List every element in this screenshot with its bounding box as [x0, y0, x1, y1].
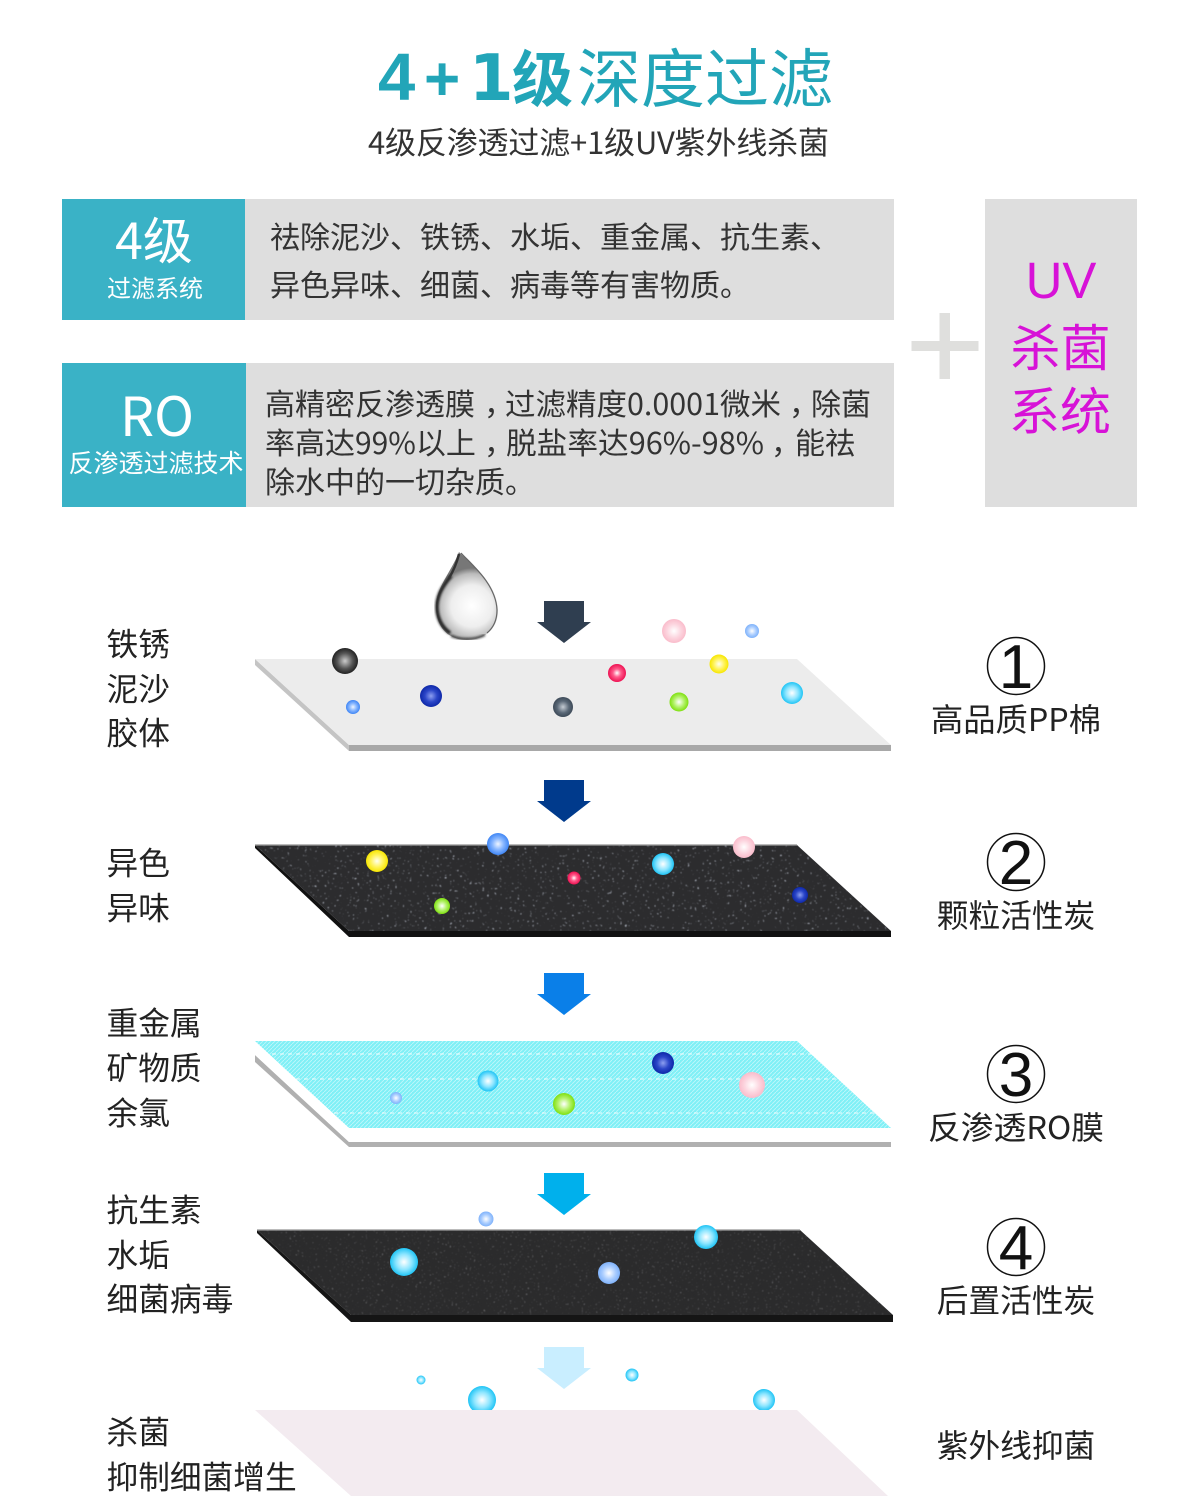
- step 3 label: 反渗透RO膜: [928, 1103, 1104, 1149]
- left labels: layer 1: 铁锈: [106, 620, 170, 666]
- layer 1: PP cotton: [255, 619, 891, 751]
- panel: RO反渗透过滤技术: 高精密反渗透膜: [265, 380, 475, 424]
- panel: RO反渗透过滤技术: ，: [484, 380, 514, 424]
- panel: RO反渗透过滤技术: 除菌: [811, 380, 871, 424]
- left labels: layer 4: 抗生素: [106, 1186, 202, 1232]
- panel: RO反渗透过滤技术: ，: [789, 380, 819, 424]
- step 1 label: 1: [999, 633, 1033, 702]
- panel: 4级过滤系统: [62, 199, 894, 320]
- left labels: layer 2: 异味: [106, 884, 170, 930]
- panel: 4级过滤系统: 祛除泥沙、铁锈、水垢、重金属、抗生素、: [270, 213, 840, 257]
- panel: RO反渗透过滤技术: [62, 363, 894, 507]
- arrow 2: [537, 780, 591, 822]
- left labels: layer 4: [106, 1186, 233, 1320]
- step 3 label: 3: [999, 1041, 1033, 1110]
- left labels: layer 4: 水垢: [106, 1230, 170, 1276]
- left labels: layer 3: 矿物质: [106, 1044, 202, 1090]
- layer 2: granular activated carbon: [255, 833, 891, 937]
- panel: RO反渗透过滤技术: ，: [771, 419, 801, 463]
- arrow 4: [537, 1173, 591, 1215]
- layer 5: UV sterilisation: [255, 1368, 888, 1496]
- panel: UV杀菌系统: UV: [1026, 252, 1096, 309]
- panel: RO反渗透过滤技术: 除水中的一切杂质。: [265, 458, 535, 502]
- step 1 label: [931, 633, 1101, 741]
- step 2 label: 2: [999, 829, 1033, 898]
- icon: water drop: [436, 552, 498, 640]
- panel: 4级过滤系统: 过滤系统: [107, 269, 203, 304]
- step 1 label: 高品质PP棉: [931, 695, 1101, 741]
- panel: UV杀菌系统: 杀菌: [1010, 309, 1110, 381]
- arrow 1: [537, 601, 591, 643]
- title: 级: [512, 46, 573, 114]
- left labels: layer 5: [106, 1408, 297, 1498]
- panel: RO反渗透过滤技术: 脱盐率达96%-98%: [506, 419, 764, 463]
- panel: 4级过滤系统: 4级: [115, 202, 193, 274]
- left labels: layer 5: 杀菌: [106, 1408, 170, 1454]
- title: +: [424, 45, 460, 114]
- step 2 label: [937, 829, 1095, 937]
- panel: 4级过滤系统: 异色异味、细菌、病毒等有害物质。: [270, 261, 750, 305]
- title: [378, 29, 833, 121]
- step 4 label: 后置活性炭: [937, 1276, 1095, 1322]
- left labels: layer 3: [106, 998, 202, 1134]
- left labels: layer 2: [106, 838, 170, 930]
- panel: UV杀菌系统: 系统: [1009, 371, 1111, 445]
- panel: UV杀菌系统: [985, 199, 1137, 507]
- panel: RO反渗透过滤技术: ，: [484, 419, 514, 463]
- left labels: layer 2: 异色: [106, 838, 170, 884]
- panel: RO反渗透过滤技术: RO: [120, 373, 194, 452]
- left labels: layer 4: 细菌病毒: [106, 1274, 233, 1320]
- left labels: layer 1: [106, 620, 170, 754]
- arrow 3: [537, 973, 591, 1015]
- left labels: layer 3: 余氯: [106, 1088, 170, 1134]
- layer 3: RO membrane: [255, 1041, 891, 1147]
- title: 深度过滤: [577, 29, 833, 121]
- title: 1: [469, 42, 514, 116]
- left labels: layer 5: 抑制细菌增生: [106, 1452, 297, 1498]
- panel: RO反渗透过滤技术: 反渗透过滤技术: [68, 444, 244, 480]
- step 4 label: [937, 1214, 1095, 1322]
- panel: RO反渗透过滤技术: 过滤精度0.0001微米: [505, 380, 781, 424]
- left labels: layer 1: 胶体: [106, 708, 170, 754]
- panel: RO反渗透过滤技术: 率高达99%以上: [265, 419, 476, 463]
- layer 4: post activated carbon: [257, 1212, 893, 1322]
- left labels: layer 1: 泥沙: [106, 664, 170, 710]
- plus sign: [912, 313, 978, 379]
- arrow 5: [537, 1347, 591, 1389]
- step 5 label: 紫外线抑菌: [937, 1421, 1095, 1467]
- title: 4: [378, 40, 415, 115]
- step 3 label: [928, 1041, 1104, 1149]
- step 4 label: 4: [999, 1214, 1033, 1283]
- subtitle: 4级反渗透过滤+1级UV紫外线杀菌: [368, 118, 829, 163]
- panel: RO反渗透过滤技术: 能祛: [795, 419, 855, 463]
- left labels: layer 3: 重金属: [106, 998, 202, 1044]
- step 2 label: 颗粒活性炭: [937, 891, 1095, 937]
